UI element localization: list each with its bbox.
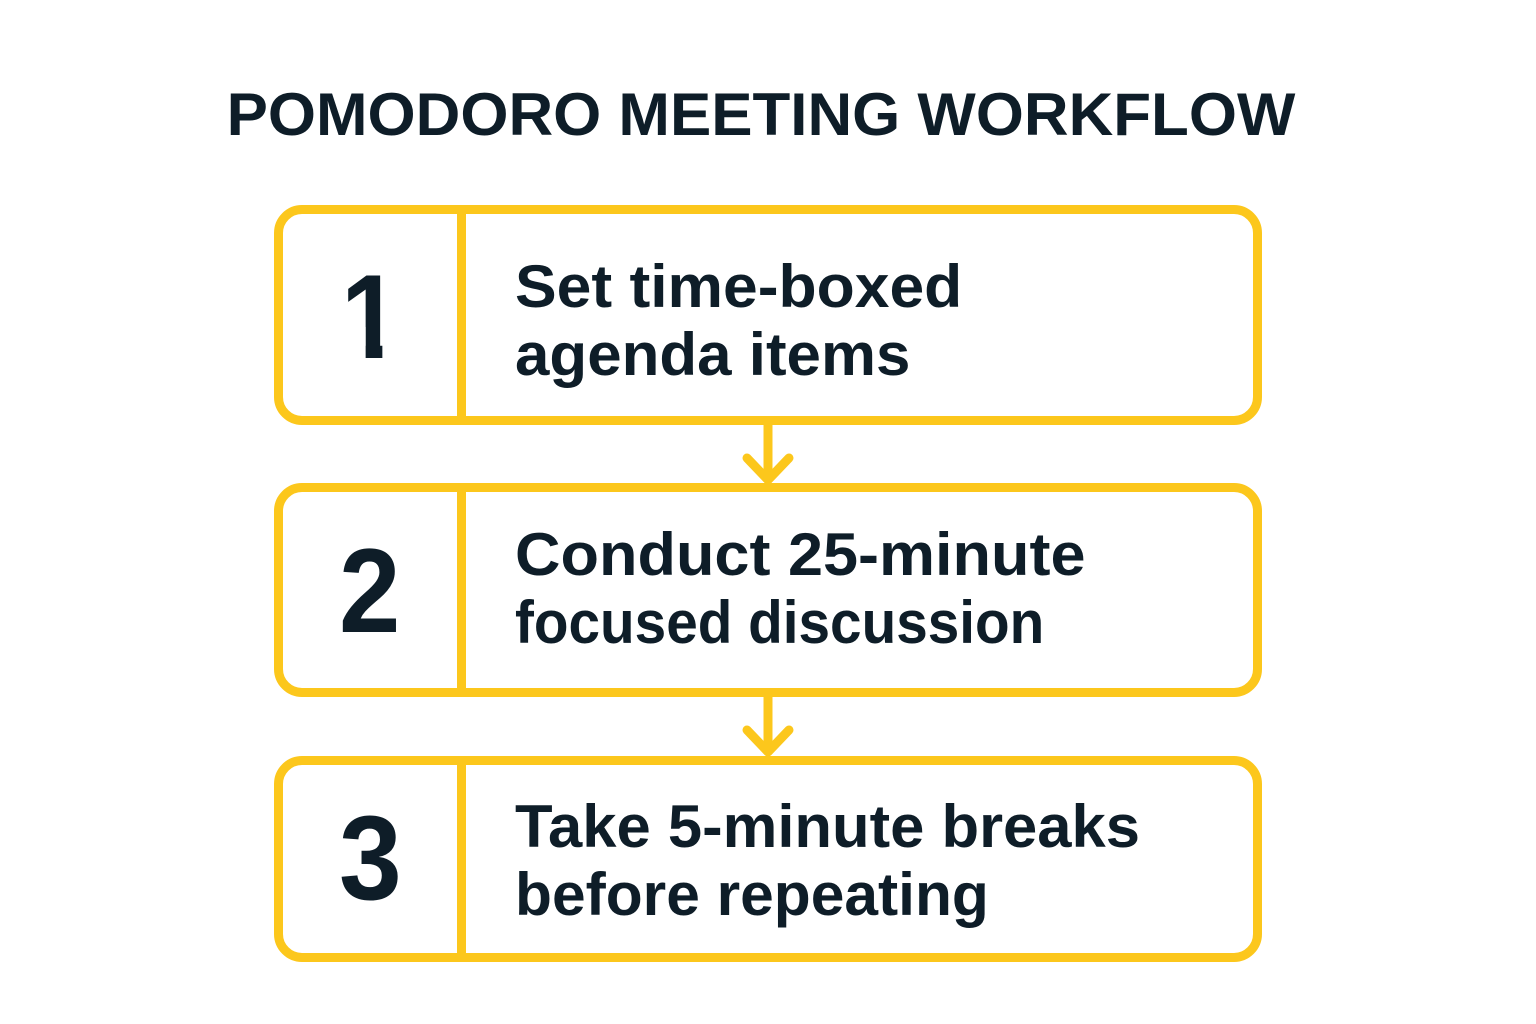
step 2 number: 2 <box>339 524 400 658</box>
step 1 box <box>274 205 1262 425</box>
step 3 text: Take 5-minute breaks <box>515 793 1140 860</box>
step 1 text: Set time-boxed <box>515 253 962 320</box>
step 3 box <box>274 756 1262 962</box>
step 1 number: 1 <box>341 250 400 384</box>
step 2 box <box>274 483 1262 697</box>
step 3 number: 3 <box>339 791 402 925</box>
step 1 text <box>515 253 962 388</box>
step 3 text: before repeating <box>515 861 989 928</box>
step 2 text <box>515 521 1086 656</box>
step 1 text: agenda items <box>515 321 910 388</box>
step 3 text <box>515 793 1140 928</box>
step 2 text: focused discussion <box>515 589 1044 656</box>
title: POMODORO MEETING WORKFLOW <box>227 81 1295 148</box>
step 2 text: Conduct 25-minute <box>515 521 1086 588</box>
